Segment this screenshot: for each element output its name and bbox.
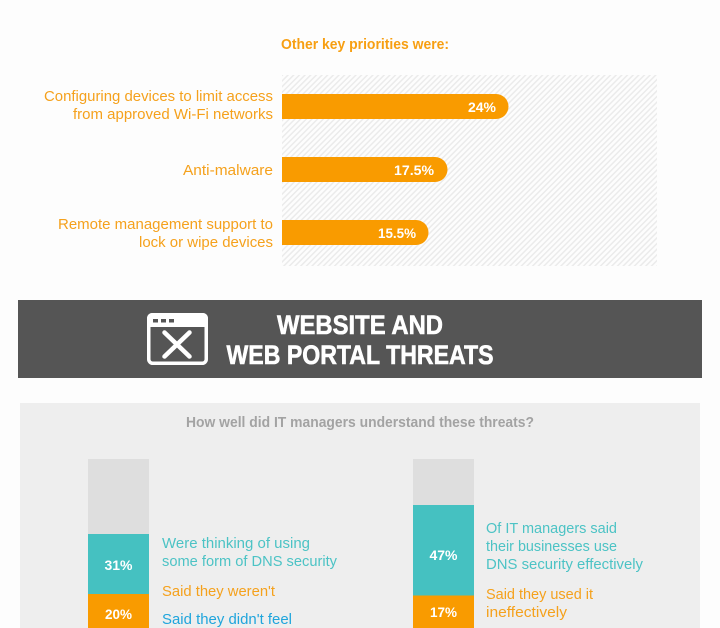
text: DNS security thinking labels [162,535,337,628]
heading: other key priorities: Other key priorities were: [281,37,449,53]
chart: DNS security thinking [88,459,149,628]
chart: key priorities bars [44,75,657,266]
banner title: WEB PORTAL THREATS [226,340,494,370]
text: DNS security thinking labels: Said they didn't feel [162,611,292,628]
bar: 15.5% [282,220,428,245]
text: DNS security thinking labels: Said they weren't [162,583,276,600]
banner title: WEBSITE AND [277,310,443,340]
label: remote management [58,216,273,251]
bar: 15.5%: 15.5% [378,225,417,241]
chart: DNS security thinking: 20% [105,606,133,622]
text: DNS security effectiveness labels [486,520,643,621]
label: anti-malware: Anti-malware [183,162,273,179]
chart: DNS security effectiveness: 17% [430,604,458,620]
banner title [226,310,494,370]
bar: 17.5%: 17.5% [394,162,435,178]
chart: DNS security effectiveness: 47% [430,547,458,563]
panel: understanding of threats [20,403,700,628]
icon: browser window with X [147,313,208,363]
label: remote management: lock or wipe devices [139,234,273,251]
text: DNS security effectiveness labels: their businesses use [486,538,617,555]
text: DNS security effectiveness labels: DNS security effectively [486,556,643,573]
text: DNS security effectiveness labels: Of IT managers said [486,520,617,537]
chart: DNS security effectiveness [413,459,474,628]
chart: DNS security thinking: 31% [104,557,133,573]
text: DNS security thinking labels: some form of DNS security [162,553,337,570]
label: configuring devices [44,88,273,123]
text: DNS security effectiveness labels: ineffectively [486,604,568,621]
banner: website and web portal threats [18,300,702,378]
text: DNS security thinking labels: Were thinking of using [162,535,310,552]
bar: 24% [282,94,508,119]
panel heading: How well did IT managers understand these threats? [186,415,534,431]
label: configuring devices: Configuring devices to limit access [44,88,273,105]
label: configuring devices: from approved Wi-Fi networks [73,106,273,123]
text: DNS security effectiveness labels: Said they used it [486,586,594,603]
bar: 24%: 24% [468,99,497,115]
label: remote management: Remote management support to [58,216,273,233]
bar: 17.5% [282,157,448,182]
